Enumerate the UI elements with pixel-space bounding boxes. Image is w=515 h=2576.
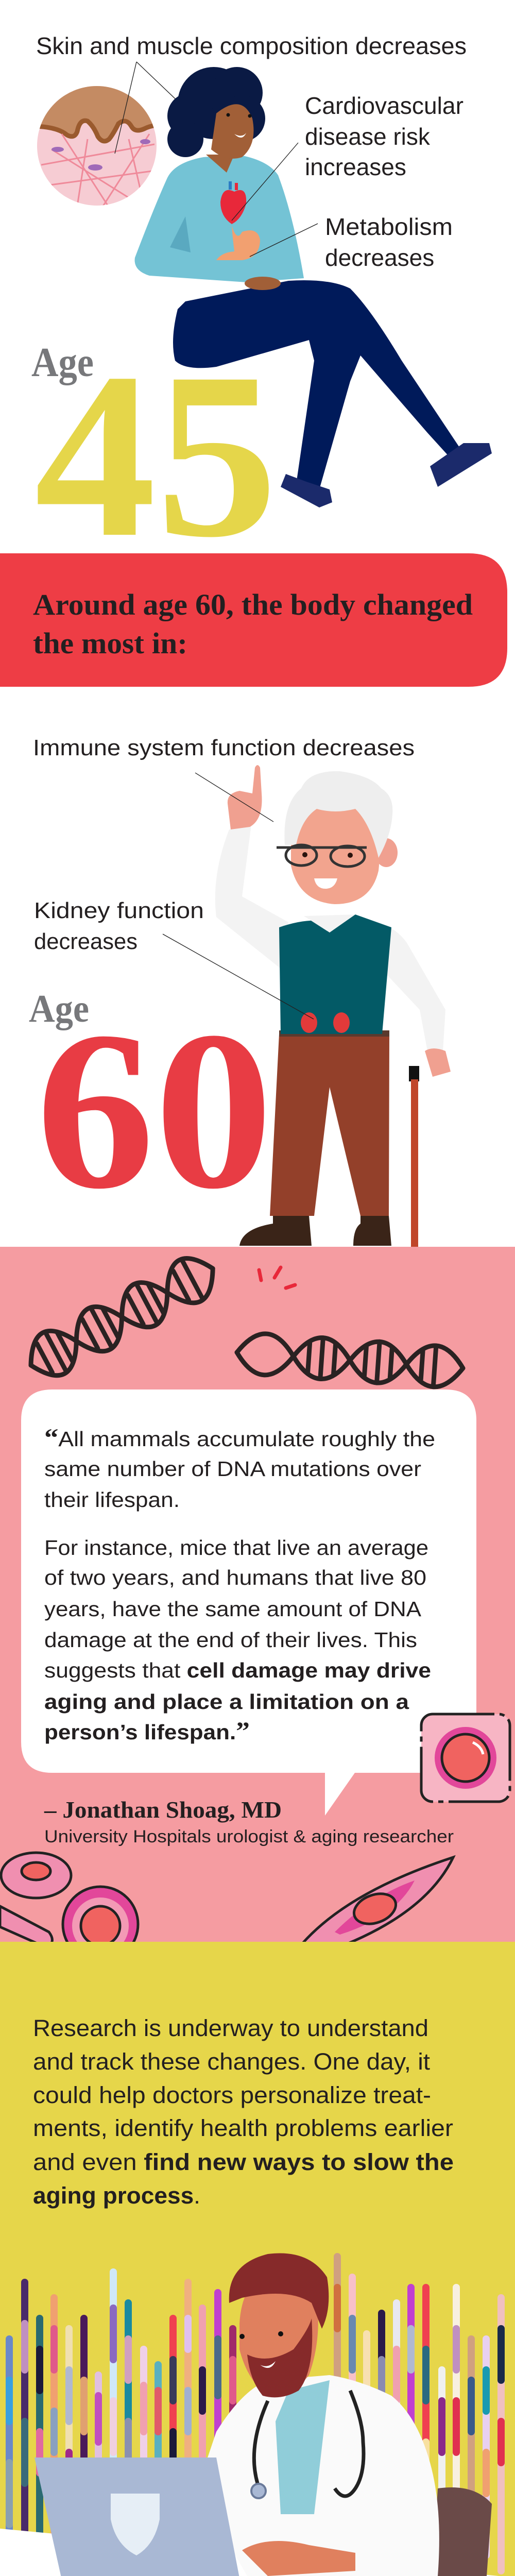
head <box>239 2267 318 2397</box>
label: cardiovascular: increases <box>305 154 406 180</box>
icon: DNA helix right <box>235 1332 465 1389</box>
icon: spindle cell <box>291 1857 453 1958</box>
title: skin and muscle: Skin and muscle composition decreases <box>36 32 467 59</box>
research text <box>33 2015 454 2209</box>
research text: aging process. <box>33 2182 200 2209</box>
quote text: same number of DNA mutations over <box>44 1457 421 1481</box>
icon: DNA helix left <box>20 1248 224 1386</box>
quote text: their lifespan. <box>44 1488 180 1512</box>
quote text: For instance, mice that live an average <box>44 1536 428 1560</box>
floor <box>0 2529 515 2576</box>
laptop shield logo <box>111 2494 160 2555</box>
quote text <box>44 1423 435 1745</box>
illustration: doctor <box>35 2253 492 2576</box>
icon: break sparks <box>259 1267 295 1288</box>
pants <box>270 1034 389 1216</box>
research text: could help doctors personalize treat- <box>33 2082 431 2108</box>
raised arm <box>215 824 288 969</box>
quote bubble <box>21 1389 476 1816</box>
quote text: years, have the same amount of DNA <box>44 1597 422 1621</box>
quote text: of two years, and humans that live 80 <box>44 1566 426 1589</box>
label: metabolism: decreases <box>325 244 434 271</box>
pants <box>173 280 464 489</box>
face <box>291 806 380 904</box>
attribution: University Hospitals urologist & aging researcher <box>44 1827 454 1846</box>
hand <box>245 277 281 290</box>
section: age 45 <box>31 32 492 586</box>
shoes <box>239 1216 312 1246</box>
label: metabolism: Metabolism <box>325 213 453 240</box>
research text: and track these changes. One day, it <box>33 2048 431 2075</box>
number: 45: 45 <box>35 324 278 586</box>
label: kidney: decreases <box>34 929 138 954</box>
label: Age: Age <box>31 340 94 385</box>
torso <box>135 155 304 282</box>
section: quote (pink) <box>0 1247 515 1962</box>
laptop <box>35 2458 243 2576</box>
label: cardiovascular: disease risk <box>305 123 431 150</box>
label: cardiovascular: Cardiovascular <box>305 92 464 119</box>
label: kidney <box>34 898 204 954</box>
label: metabolism <box>325 213 453 271</box>
research text: ments, identify health problems earlier <box>33 2115 453 2141</box>
chart: colourful data bars <box>9 2257 501 2571</box>
hair <box>284 771 392 858</box>
arm/hand <box>242 2541 355 2576</box>
callout lines: heart, stomach <box>232 143 318 257</box>
section: age 60 <box>29 735 451 1251</box>
vest <box>279 914 391 1034</box>
number: 60: 60 <box>36 985 273 1236</box>
banner: around age 60: Around age 60, the body changed <box>33 588 473 621</box>
section: research (yellow) <box>0 1942 515 2576</box>
quote text: person’s lifespan. ” <box>44 1716 250 1745</box>
shoes <box>281 474 332 507</box>
hair <box>229 2253 329 2329</box>
banner: around age 60 <box>0 553 507 687</box>
stethoscope <box>254 2391 364 2496</box>
illustration: seated woman <box>135 67 492 507</box>
label: immune: Immune system function decreases <box>33 735 415 760</box>
stomach <box>216 226 260 260</box>
label: cardiovascular <box>305 92 464 180</box>
heart <box>220 181 246 224</box>
attribution: – Jonathan Shoag, MD <box>44 1797 282 1823</box>
glasses <box>277 845 367 867</box>
neck v <box>206 155 234 173</box>
label: kidney: Kidney function <box>34 898 204 923</box>
right arm <box>376 926 445 1051</box>
ear <box>375 838 398 867</box>
quote text: aging and place a limitation on a <box>44 1690 409 1714</box>
beard <box>247 2318 312 2397</box>
icon: cell in square <box>421 1714 510 1802</box>
research text: and even find new ways to slow the <box>33 2149 454 2175</box>
banner: around age 60: the most in: <box>33 626 187 660</box>
icon: skin cross-section circle <box>37 86 157 206</box>
research text: Research is underway to understand <box>33 2015 428 2041</box>
quote text: suggests that cell damage may drive <box>44 1658 431 1682</box>
face <box>211 104 253 159</box>
illustration: old man <box>215 765 451 1251</box>
chair <box>433 2487 492 2576</box>
cane <box>409 1066 419 1081</box>
quote text: “All mammals accumulate roughly the <box>44 1423 435 1452</box>
label: Age: Age <box>29 987 89 1030</box>
attribution <box>44 1797 454 1846</box>
icon: blood cells left <box>0 1853 138 1962</box>
hair <box>167 67 265 157</box>
callout lines: immune, kidney <box>163 773 314 1019</box>
callout lines: skin <box>115 62 214 154</box>
quote text: damage at the end of their lives. This <box>44 1628 417 1652</box>
shirt <box>276 2380 330 2514</box>
coat <box>197 2375 439 2576</box>
kidneys <box>301 1012 350 1033</box>
